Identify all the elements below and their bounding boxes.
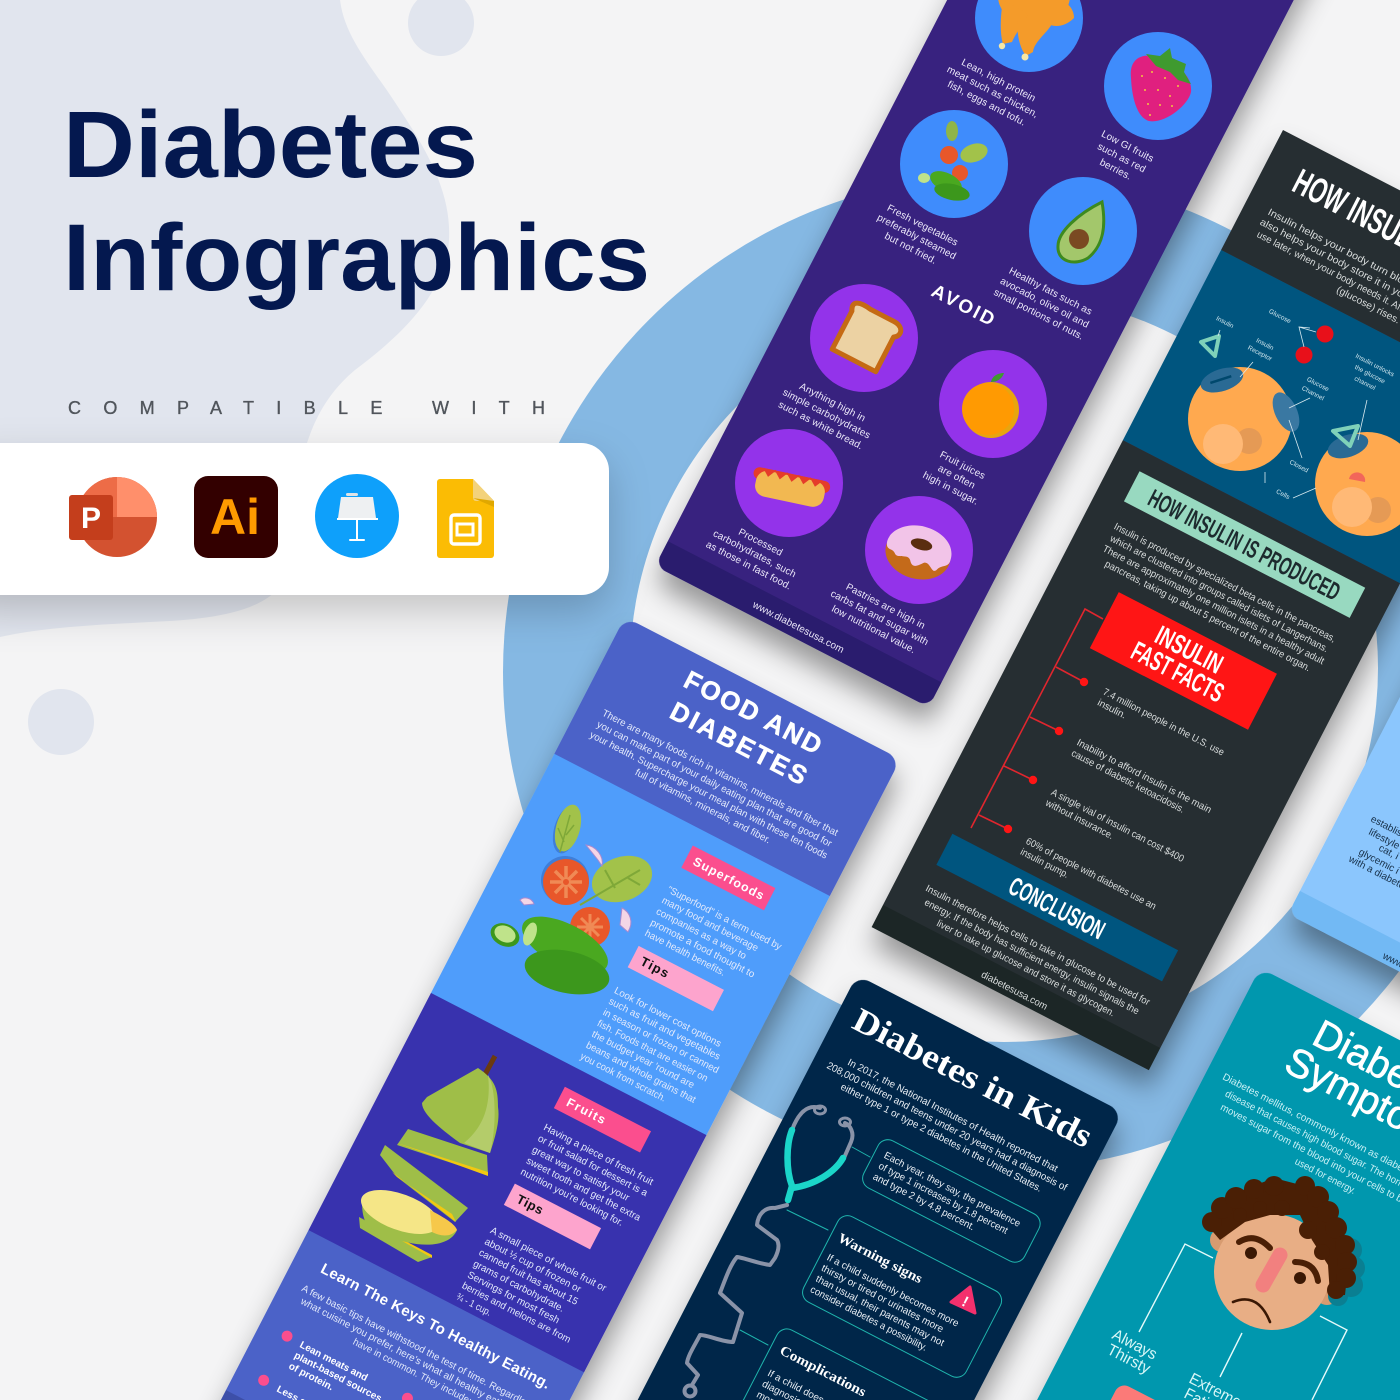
text: simple carbs: such as white bread. [776, 400, 865, 452]
text: insulin production: There are approximately one million islets in a healthy adult [1100, 544, 1326, 667]
text: fruits: nutrition you're looking for. [519, 1167, 625, 1229]
food card content [253, 636, 881, 1400]
text: tips 2: berries and melons are from [460, 1280, 572, 1346]
tag: superfoods: Superfoods [691, 855, 766, 903]
decorative circle top [408, 0, 474, 56]
heading: food and diabetes: FOOD AND [679, 664, 827, 760]
text: fruit juices: high in sugar. [921, 470, 980, 508]
icon: donut [865, 496, 973, 604]
icon: bread [810, 284, 918, 392]
text: tips 2 [454, 1225, 609, 1361]
tag: tips: Tips [638, 954, 671, 981]
tag: tips 2 [504, 1184, 601, 1249]
text: bullet items: Lean meats and [298, 1340, 369, 1384]
text: insulin production: Insulin is produced by specialized beta cells in the pancreas, [1112, 521, 1337, 645]
text: superfoods [643, 885, 783, 996]
text: superfoods: many food and beverage [660, 895, 760, 954]
decorative circle left [28, 689, 94, 755]
text: tips: the budget year 'round are [590, 1029, 696, 1091]
tag: superfoods [681, 846, 775, 910]
cell labels: Glucose [1305, 376, 1330, 393]
icon: chicken [975, 0, 1083, 72]
heading: learn the keys: Learn The Keys To Healthy Eating. [318, 1260, 553, 1393]
box: warning signs: If a child suddenly becomes more [825, 1252, 961, 1330]
text: low GI fruits: such as red [1095, 141, 1147, 175]
banner: conclusion: CONCLUSION [1004, 871, 1110, 945]
text: tips: Look for lower cost options [612, 985, 723, 1050]
label: always thirsty: Always [1109, 1326, 1160, 1364]
text: conclusion: energy. If the body has sufficient energy, insulin signals the [922, 897, 1141, 1017]
panel: diabetes symptoms card [939, 968, 1400, 1400]
text: fact 4: 60% of people with diabetes use an [1024, 836, 1158, 912]
text: low GI fruits: berries. [1098, 157, 1133, 183]
text: food intro: full of vitamins, minerals, and fiber. [633, 767, 772, 846]
box: prevalence: and type 2 by 4.8 percent. [871, 1172, 976, 1233]
text: fresh vegetables: preferably steamed [875, 212, 958, 262]
text: lean protein: meat such as chicken, [945, 64, 1040, 120]
title: Diabetes [63, 92, 478, 198]
text: processed carbs: carbohydrates, such [711, 528, 798, 580]
banner: how insulin is produced [1124, 471, 1365, 618]
text: healthy fats: small portions of nuts. [992, 287, 1085, 343]
text: light card lines: cat, i [1377, 843, 1400, 862]
background blob [0, 0, 449, 637]
heading: food and diabetes: DIABETES [665, 696, 812, 791]
text: tips: you cook from scratch. [578, 1051, 668, 1105]
text: superfoods: companies as a way to [654, 906, 748, 962]
text: fact 3: without insurance. [1043, 797, 1115, 842]
text: conclusion: Insulin therefore helps cells to take in glucose to be used for [923, 883, 1152, 1009]
cell labels: Insulin [1215, 315, 1235, 330]
box: warning signs: consider diabetes a possibility. [808, 1284, 929, 1354]
text: kids intro: either type 1 or type 2 diabetes in the United States. [839, 1082, 1043, 1195]
connector lines [1139, 1244, 1347, 1400]
text: tips: beans and whole grains that [584, 1040, 698, 1106]
illustration: pear [355, 1056, 499, 1262]
text: processed carbs: Processed [736, 527, 784, 559]
text: pastries: Pastries are high in [844, 582, 927, 632]
cell labels: Closed [1288, 459, 1310, 475]
dark card content [893, 155, 1400, 1058]
text: simple carbs: Anything high in [797, 381, 867, 424]
text: food intro: you can make part of your daily eating plan that are good for [595, 719, 834, 850]
tag: fruits [554, 1087, 651, 1153]
text: tips: in season or frozen or canned [601, 1007, 721, 1076]
cell labels: Insulin [1255, 337, 1275, 352]
panel: dark insulin card [872, 130, 1400, 1070]
illustration: stethoscope [684, 1106, 870, 1396]
text: dark card url: diabetesusa.com [979, 969, 1049, 1013]
cell labels: Cells [1275, 488, 1291, 501]
cell labels: channel [1353, 375, 1377, 392]
text: tips 2: grams of carbohydrate. [471, 1259, 566, 1315]
text: bullet items [275, 1340, 389, 1400]
box: warning signs [799, 1212, 1005, 1381]
text: superfoods: have health benefits. [643, 928, 727, 979]
text: fruits: or fruit salad for dessert is a [536, 1133, 650, 1199]
panel: food and diabetes card [166, 617, 900, 1400]
box: insulin fast facts: INSULIN [1150, 620, 1228, 680]
text: purple card url: www.diabetesusa.com [750, 599, 846, 656]
text: symptoms intro: used for energy. [1293, 1156, 1357, 1197]
box: insulin fast facts [1090, 592, 1277, 730]
icon: avocado [1029, 177, 1137, 285]
label: always thirsty [1104, 1326, 1160, 1378]
heading: avoid: AVOID [928, 281, 998, 331]
icon: Illustrator: Ai [210, 489, 260, 545]
text: simple carbs: simple carbohydrates [781, 387, 872, 441]
box: complications: Complications [777, 1343, 869, 1400]
panel: light blue card [1279, 679, 1400, 1008]
title [63, 92, 650, 311]
text: pastries: low nutritional value. [830, 604, 917, 656]
text: fruits [519, 1122, 660, 1235]
box: warning signs: Warning signs [835, 1231, 925, 1287]
text: food intro: your health. Supercharge your meal plan with these ten foods [588, 730, 829, 862]
text: tips 2: canned fruit has about 15 [477, 1248, 580, 1308]
cell labels: Glucose [1267, 308, 1292, 325]
label: always thirsty: Thirsty [1104, 1341, 1153, 1378]
text: fact 2: Inability to afford insulin is the main [1075, 737, 1213, 816]
icon: warning triangle [951, 1287, 975, 1313]
banner: conclusion [936, 834, 1178, 981]
box: insulin fast facts: FAST FACTS [1126, 636, 1229, 708]
panel: purple foods card [655, 0, 1341, 707]
text: fact 3: A single vial of insulin can cost $400 [1049, 787, 1186, 865]
icon: PowerPoint [69, 477, 157, 557]
text: fruits: great way to satisfy your [530, 1144, 632, 1204]
box: prevalence: Each year, they say, the prevalence [882, 1150, 1022, 1230]
tag: tips 2: Tips [514, 1191, 546, 1217]
box: warning signs: thirsty or tired or urinates more [819, 1263, 945, 1335]
text: insulin production: pancreas, taking up about 5 percent of the entire organ. [1103, 559, 1312, 674]
text: fresh vegetables: Fresh vegetables [885, 203, 960, 249]
cell labels: Receptor [1246, 345, 1274, 363]
icon: Keynote [315, 474, 399, 558]
text: tips 2: ¾ - 1 cup. [454, 1292, 493, 1319]
bullets [256, 1328, 415, 1400]
icon: Illustrator [194, 476, 278, 558]
icon: Google Slides [437, 479, 494, 558]
compatible with label: COMPATIBLE WITH [68, 398, 545, 418]
text: light card lines: glycemic i [1357, 847, 1400, 877]
box: prevalence [859, 1136, 1044, 1266]
text: healthy fats: Healthy fats such as [1007, 266, 1094, 318]
heading: food and diabetes [663, 664, 828, 791]
title: Infographics [63, 205, 650, 311]
box: warning signs: than usual, their parents may not [814, 1274, 946, 1349]
text: how insulin intro: (glucose) rises. [1334, 285, 1400, 326]
text: low GI fruits: Low GI fruits [1099, 129, 1155, 165]
text: processed carbs: as those in fast food. [704, 539, 793, 592]
text: fruits: sweet tooth and get the extra [524, 1156, 643, 1224]
box: complications [722, 1325, 945, 1400]
illustration: sad face [1202, 1176, 1365, 1330]
text: conclusion: liver to take up glucose and store it as glycogen. [935, 918, 1117, 1019]
icon: strawberry [1104, 32, 1212, 140]
text: insulin production: which are clustered into groups called islets of Langerhans. [1107, 533, 1330, 655]
cell labels: the glucose [1353, 364, 1386, 386]
cell labels: Channel [1300, 385, 1326, 403]
text: bullet items: of protein. [287, 1361, 335, 1393]
text: lean protein: fish, eggs and tofu. [945, 79, 1027, 129]
text: kids intro: In 2017, the National Institutes of Health reported that [846, 1057, 1060, 1175]
text: lean protein: Lean, high protein [959, 57, 1037, 104]
text: tips: such as fruit and vegetables [607, 996, 722, 1063]
text: fact 1: 7.4 million people in the U.S. use [1101, 687, 1226, 759]
illustration: vegetables [487, 802, 659, 1001]
panel: compatibility card [0, 443, 609, 595]
text: fact 1: insulin. [1095, 697, 1128, 721]
text: tips 2: about ½ cup of frozen or [483, 1236, 583, 1296]
text: fresh vegetables: but not fried. [883, 231, 938, 267]
text: fact 4: insulin pump. [1018, 847, 1070, 881]
illustration: cells [1188, 326, 1400, 536]
text: tips: fish. Foods that are easier on [595, 1018, 709, 1085]
kids card content [652, 1000, 1100, 1400]
text: superfoods: promote a food thought to [648, 917, 757, 981]
box: prevalence: of type 1 increases by 1.8 percent [876, 1161, 1010, 1237]
icon: vegetables [900, 110, 1008, 218]
panel: diabetes in kids card [536, 975, 1123, 1400]
text: superfoods: "Superfood" is a term used by [665, 885, 783, 953]
text: tips [578, 985, 732, 1120]
text: tips 2: Servings for most fresh [465, 1270, 561, 1326]
text: kids intro: 208,000 children and teens under 20 years had a diagnosis of [825, 1061, 1069, 1194]
icon: warning triangle: ! [959, 1293, 971, 1311]
text: fact 2: cause of diabetic ketoacidosis. [1069, 748, 1186, 816]
text: fruits: Having a piece of fresh fruit [541, 1122, 655, 1188]
timeline [971, 609, 1103, 833]
icon: orange [939, 350, 1047, 458]
text: pastries: carbs fat and sugar with [829, 589, 930, 648]
text: fruit juices: Fruit juices [938, 450, 987, 482]
text: food intro: There are many foods rich in vitamins, minerals and fiber that [600, 708, 840, 839]
cell labels: Insulin unlocks [1354, 353, 1396, 379]
blue ring [503, 174, 1400, 1170]
coral box [1092, 1382, 1191, 1400]
cell labels [1215, 308, 1396, 501]
text: fruit juices: are often [936, 463, 977, 491]
icon: hot dog [735, 429, 843, 537]
heading: diabetes in kids: Diabetes in Kids [847, 1001, 1098, 1155]
text: healthy fats: avocado, olive oil and [998, 276, 1091, 331]
tag: fruits: Fruits [564, 1095, 608, 1127]
tag: tips [628, 946, 724, 1011]
text: tips 2: A small piece of whole fruit or [488, 1225, 609, 1295]
text: light card lines [1346, 814, 1400, 971]
icon: PowerPoint: P [81, 502, 101, 535]
